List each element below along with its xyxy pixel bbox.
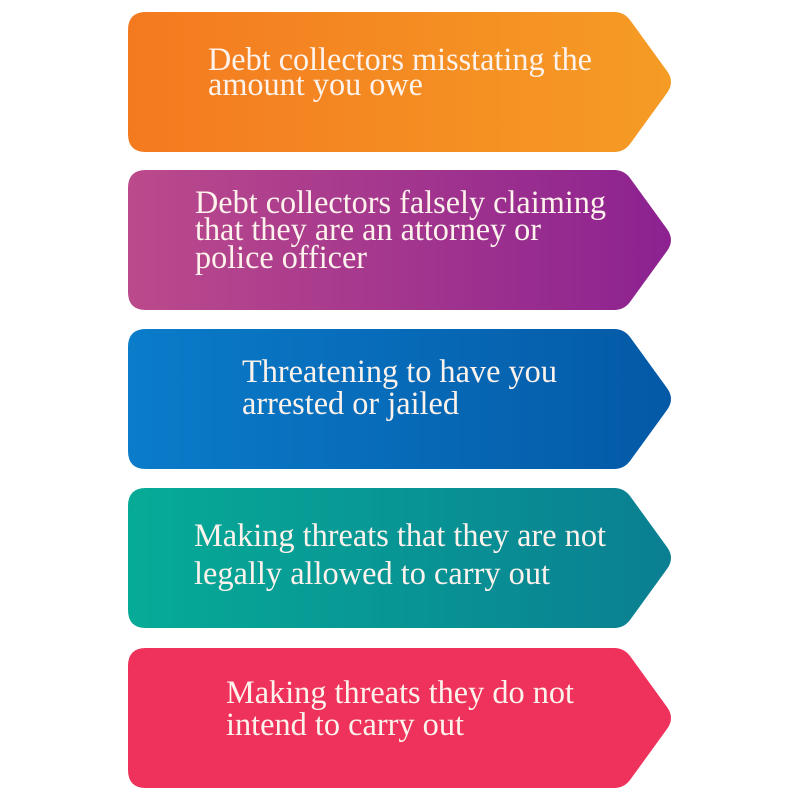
text: threatening arrest	[242, 354, 557, 422]
text: threats not legally allowed	[194, 518, 606, 592]
panel: arrow 5, threats not intended	[128, 648, 671, 788]
text: misstating the amount	[208, 42, 592, 103]
text: threats not intended: Making threats they do not	[226, 675, 574, 711]
text: falsely claiming: that they are an attorney or	[195, 212, 541, 248]
text: threatening arrest: arrested or jailed	[242, 386, 459, 422]
panel: arrow 3, threatening arrest	[128, 329, 671, 469]
arrow shape: purple	[128, 170, 671, 310]
text: threats not intended	[226, 675, 574, 743]
arrow shape: orange	[128, 12, 671, 152]
panel: arrow 2, falsely claiming	[128, 170, 671, 310]
panel: arrow 4, threats not legally allowed	[128, 488, 671, 628]
text: threatening arrest: Threatening to have you	[242, 354, 557, 390]
text: falsely claiming	[195, 185, 606, 276]
text: threats not legally allowed: Making threats that they are not	[194, 518, 606, 554]
text: threats not intended: intend to carry out	[226, 707, 464, 743]
text: misstating the amount: amount you owe	[208, 67, 423, 103]
arrow shape: blue	[128, 329, 671, 469]
text: misstating the amount: Debt collectors misstating the	[208, 42, 592, 78]
text: falsely claiming: Debt collectors falsely claiming	[195, 185, 606, 221]
text: threats not legally allowed: legally allowed to carry out	[194, 556, 550, 592]
panel: arrow 1, misstating the amount	[128, 12, 671, 152]
arrow shape: teal	[128, 488, 671, 628]
text: falsely claiming: police officer	[195, 240, 367, 276]
arrow shape: red	[128, 648, 671, 788]
